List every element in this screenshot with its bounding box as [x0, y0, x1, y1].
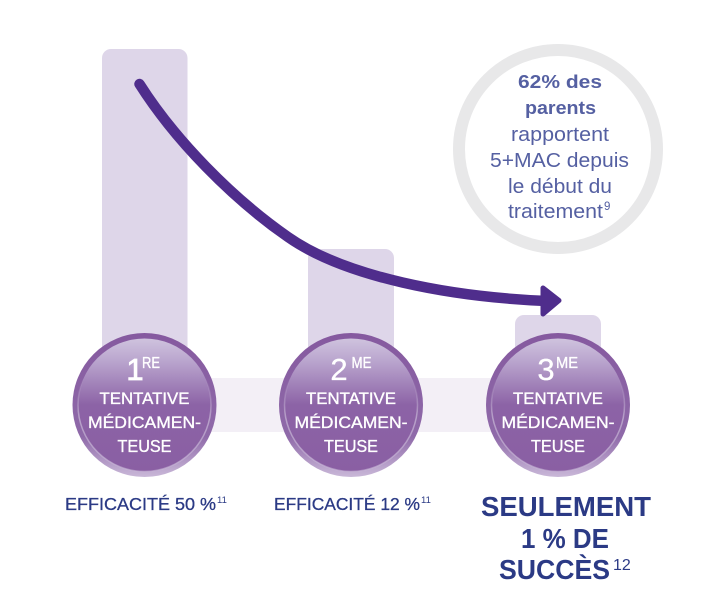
badge: third attempt: 3: [537, 352, 555, 387]
callout: 62% of parents: traitement: [508, 201, 603, 223]
badge: first attempt: 1: [126, 352, 144, 387]
badge: first attempt: MÉDICAMEN-: [88, 413, 201, 432]
badge: first attempt: [72, 333, 216, 477]
badge: second attempt: MÉDICAMEN-: [294, 413, 408, 432]
label: efficacy 12%: EFFICACITÉ 12 %: [274, 494, 420, 514]
badge: second attempt: TENTATIVE: [306, 389, 396, 408]
badge: second attempt: [279, 333, 423, 477]
bar: second attempt: [308, 249, 394, 389]
badge: third attempt: [486, 333, 630, 477]
callout: 62% of parents: 9: [604, 201, 610, 213]
label: only 1% success: SUCCÈS: [499, 554, 610, 585]
badge: third attempt: ME: [556, 355, 578, 372]
label: only 1% success: SEULEMENT: [481, 491, 651, 522]
label: efficacy 50%: 11: [217, 495, 227, 506]
badge: second attempt: ME: [352, 355, 372, 372]
callout: 62% of parents: rapportent: [511, 124, 609, 146]
callout: 62% of parents: 5+MAC depuis: [490, 150, 629, 172]
badge: third attempt: TEUSE: [531, 436, 585, 456]
callout: 62% of parents: le début du: [508, 176, 612, 198]
badge: first attempt: TENTATIVE: [100, 389, 190, 408]
badge: first attempt: RE: [142, 355, 160, 372]
badge: second attempt: TEUSE: [324, 436, 378, 456]
label: efficacy 50%: EFFICACITÉ 50 %: [65, 494, 216, 514]
badge: first attempt: TEUSE: [118, 436, 172, 456]
label: only 1% success: [481, 491, 651, 585]
callout: 62% of parents: 62% des: [518, 71, 602, 92]
callout: 62% of parents: [459, 50, 657, 248]
badge: third attempt: MÉDICAMEN-: [502, 413, 614, 432]
bar: first attempt: [102, 49, 188, 389]
callout: 62% of parents: parents: [525, 97, 596, 118]
label: only 1% success: 1 % DE: [521, 523, 609, 554]
connecting band: [180, 378, 520, 432]
bar: third attempt: [515, 315, 601, 389]
badge: second attempt: 2: [330, 352, 348, 387]
label: only 1% success: 12: [613, 557, 631, 574]
label: efficacy 12%: 11: [421, 495, 431, 506]
badge: third attempt: TENTATIVE: [513, 389, 603, 408]
arrow: declining efficacy: [140, 84, 559, 314]
